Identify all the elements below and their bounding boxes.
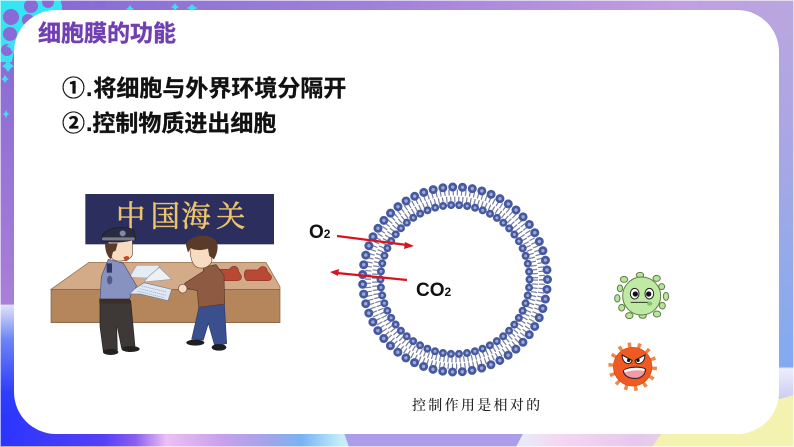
- title: 细胞膜的功能: [38, 20, 176, 46]
- arrow: O2 entering: [337, 236, 414, 249]
- caption: 控制作用是相对的: [412, 395, 542, 415]
- phospholipid tails: [368, 192, 542, 366]
- label: CO2: CO2: [416, 280, 452, 301]
- counter desk: [51, 262, 280, 323]
- red items on counter: [218, 266, 271, 281]
- arrow: CO2 leaving: [330, 269, 407, 280]
- icon: red virus: [611, 345, 654, 388]
- document held between figures: [129, 283, 172, 301]
- outer phospholipid heads: [362, 187, 548, 372]
- officer: [99, 227, 140, 355]
- papers on counter: [129, 265, 172, 282]
- illustration: customs officer checking documents: [51, 194, 280, 355]
- icon: green virus: [615, 272, 669, 319]
- sign: China Customs: [85, 194, 274, 244]
- inner phospholipid heads: [380, 205, 530, 354]
- point 2 text: ②.控制物质进出细胞: [62, 110, 276, 136]
- cell membrane ring: [362, 187, 548, 372]
- traveller: [178, 236, 227, 351]
- point 1 text: ①.将细胞与外界环境分隔开: [62, 75, 346, 101]
- sign: China Customs: 中国海关: [116, 194, 245, 236]
- label: O2: O2: [309, 222, 331, 243]
